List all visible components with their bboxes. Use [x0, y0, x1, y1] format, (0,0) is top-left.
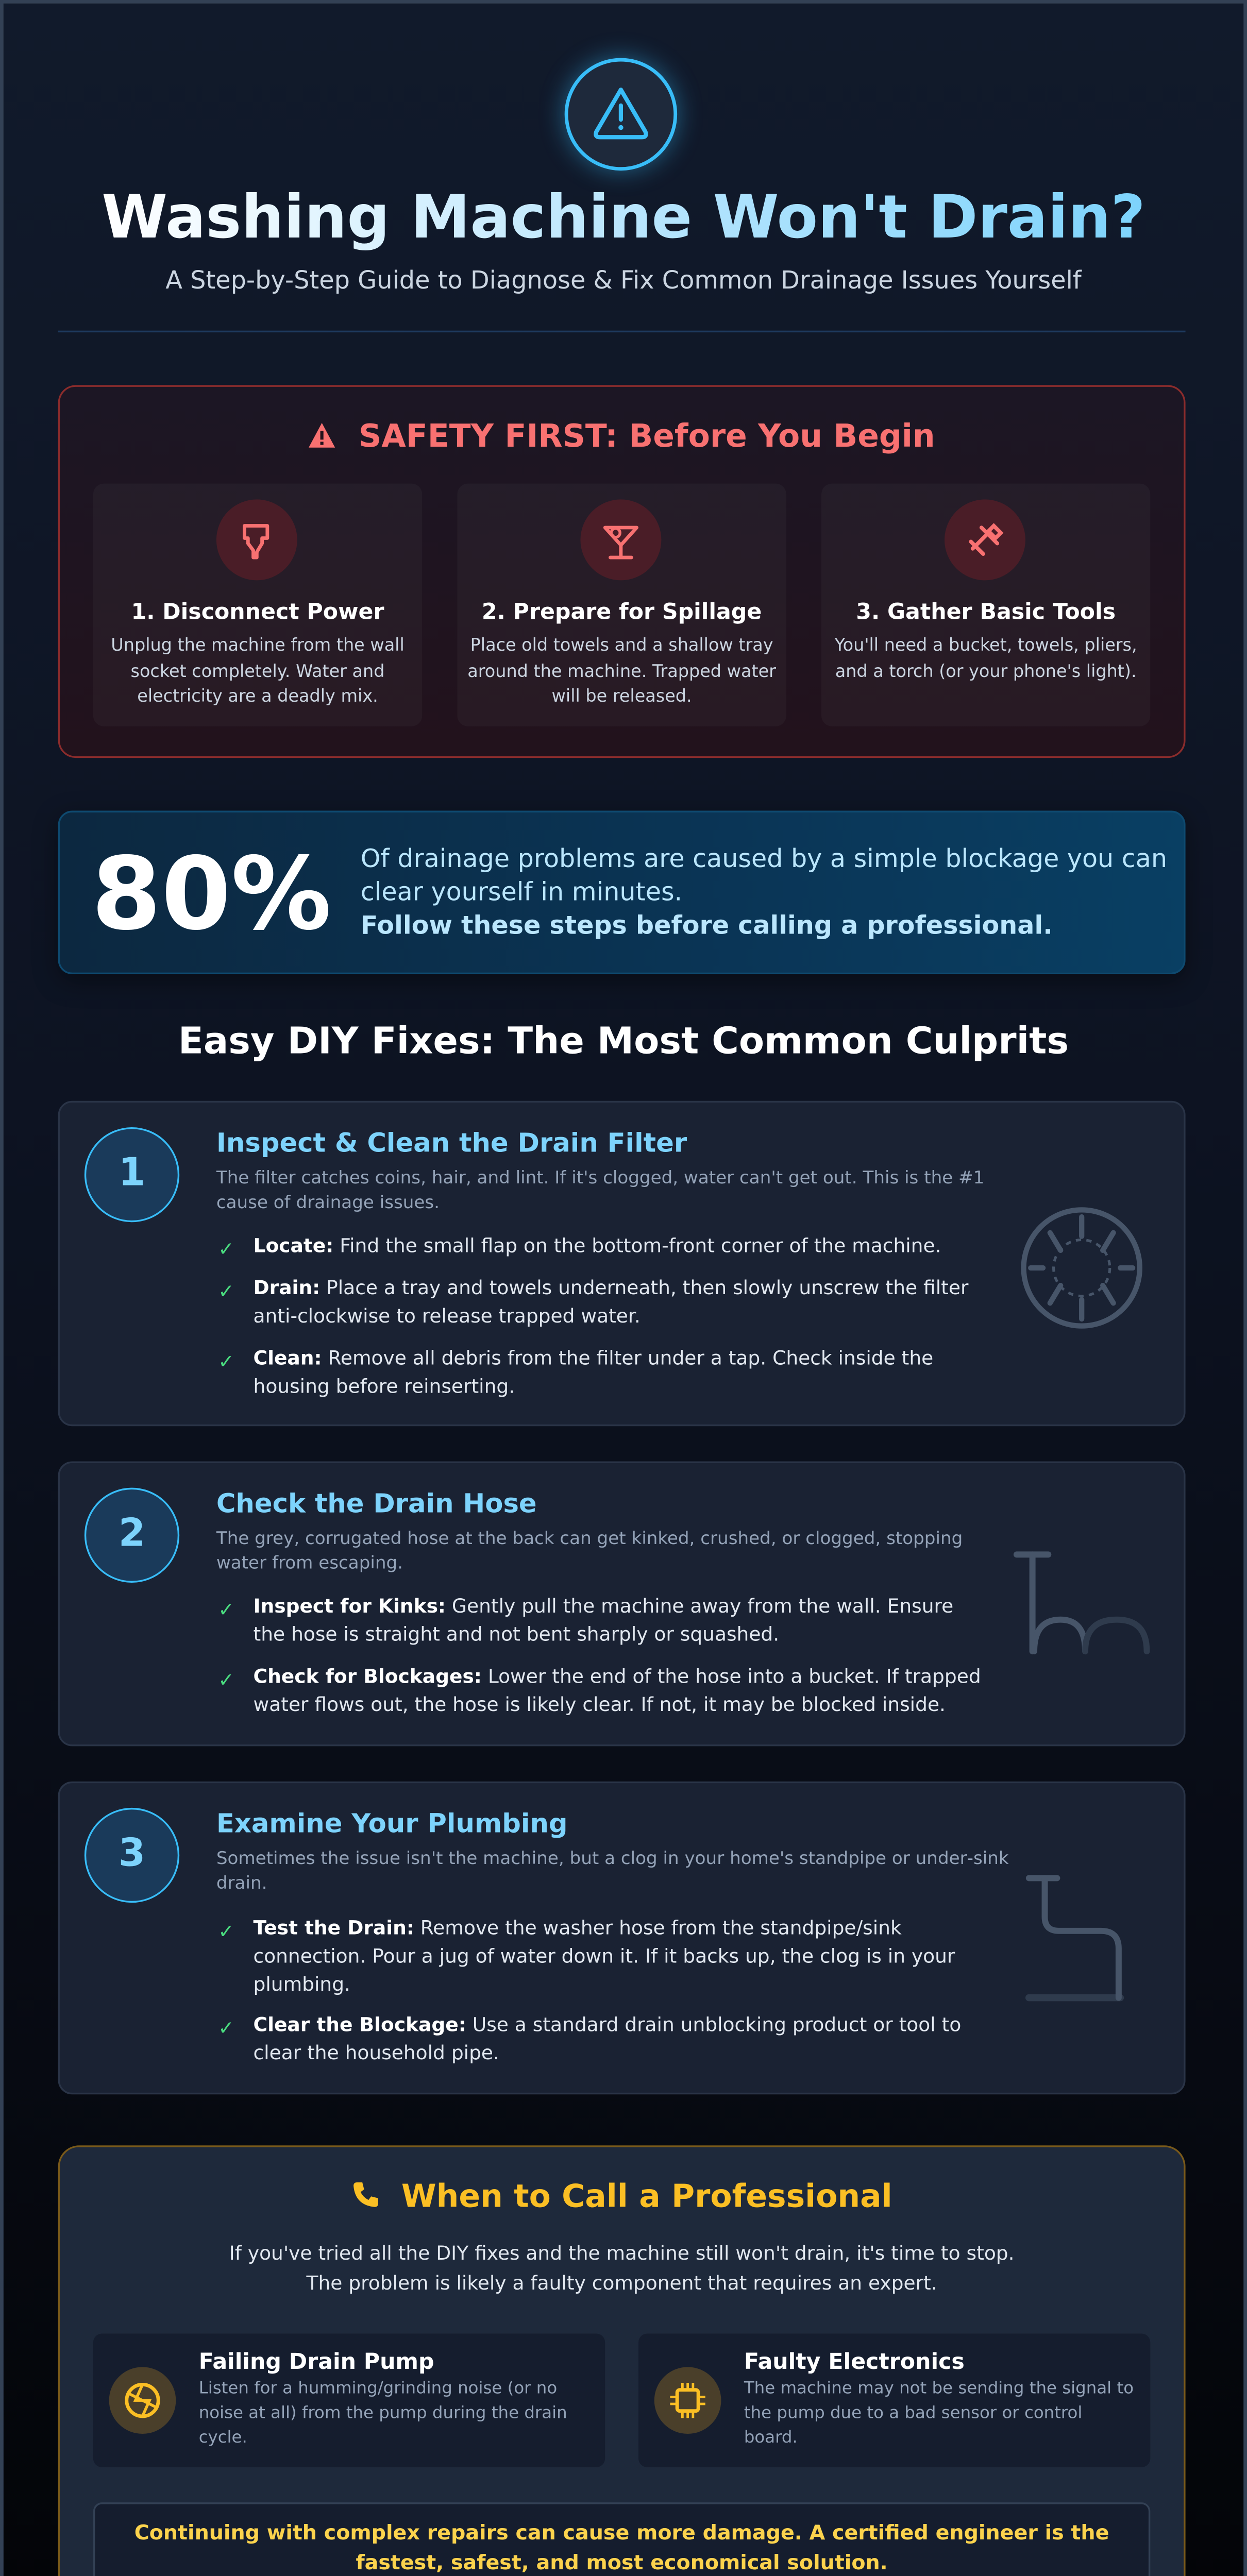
pro card: drain pump: cycle. — [199, 2429, 247, 2448]
safety card 2: 2. Prepare for Spillage — [482, 598, 762, 624]
stat text — [361, 846, 1167, 941]
card description: The grey, corrugated hose at the back can get kinked, crushed, or clogged, stopping water from escaping. — [216, 1530, 963, 1574]
safety card 3: 3. Gather Basic Tools — [856, 598, 1116, 624]
pro card: drain pump: Listen for a humming/grinding noise (or no — [199, 2379, 557, 2399]
pro card: electronics: The machine may not be sending the signal to — [744, 2379, 1134, 2399]
bullet: test: ✓ — [218, 1920, 234, 1943]
section heading: Easy DIY Fixes: The Most Common Culprits — [178, 1020, 1069, 1062]
safety card 1 — [93, 484, 422, 726]
pro intro text — [229, 2242, 1015, 2294]
card description: Sometimes the issue isn't the machine, but a clog in your home's standpipe or under‑sink drain. — [216, 1850, 1009, 1894]
safety heading: SAFETY FIRST: Before You Begin — [359, 418, 935, 455]
number badge 3: 3 — [119, 1833, 145, 1876]
subtitle: A Step-by-Step Guide to Diagnose & Fix Common Drainage Issues Yourself — [165, 267, 1082, 295]
number badge 2 — [85, 1488, 179, 1583]
warning callout: Continuing with complex repairs can cause more damage. A certified engineer is the fastest, safest, and most economical solution. — [134, 2520, 1109, 2574]
safety card 3: You'll need a bucket, towels, pliers, and a torch (or your phone's light). — [835, 637, 1137, 682]
number badge 3 — [85, 1808, 179, 1903]
pro card: electronics: board. — [744, 2429, 798, 2448]
safety card 2: Place old towels and a shallow tray around the machine. Trapped water will be released. — [467, 637, 776, 707]
warning callout — [93, 2502, 1150, 2576]
card title: Inspect & Clean the Drain Filter — [216, 1127, 687, 1159]
pro intro text: The problem is likely a faulty component that requires an expert. — [307, 2271, 937, 2294]
safety card 3 — [821, 484, 1150, 726]
card title: Check the Drain Hose — [216, 1488, 537, 1519]
pro intro text: If you've tried all the DIY fixes and the machine still won't drain, it's time to stop. — [229, 2242, 1015, 2265]
number badge 1: 1 — [119, 1152, 145, 1196]
card title: Examine Your Plumbing — [216, 1808, 568, 1839]
icon: hose — [1014, 1551, 1150, 1655]
bullet: kinks: ✓ — [218, 1599, 234, 1621]
icon: pipe — [1025, 1875, 1124, 2001]
safety card 2 — [457, 484, 786, 726]
bullet: blockages: Check for Blockages: Lower the end of the hose into a bucket. If trapped water flows out, the hose is likely clear. If not, it may be blocked inside. — [254, 1665, 981, 1716]
pro heading: When to Call a Professional — [401, 2179, 892, 2216]
icon: tools — [945, 499, 1025, 580]
safety card 1: Unplug the machine from the wall socket completely. Water and electricity are a deadly mix. — [111, 637, 405, 707]
pro card: electronics: Faulty Electronics — [744, 2348, 965, 2374]
card description: The filter catches coins, hair, and lint. If it's clogged, water can't get out. This is the #1 cause of drainage issues. — [216, 1170, 984, 1213]
pro card: drain pump: Failing Drain Pump — [199, 2348, 434, 2374]
bullet: clean: ✓ — [218, 1350, 234, 1374]
bullet: drain: Drain: Place a tray and towels underneath, then slowly unscrew the filter anti-clockwise to release trapped water. — [254, 1277, 968, 1328]
safety card 1: 1. Disconnect Power — [131, 598, 384, 624]
panel: safety first — [58, 385, 1186, 758]
number badge 1 — [85, 1127, 179, 1222]
panel: when to call a professional — [58, 2145, 1186, 2576]
bullet: locate: ✓ — [218, 1238, 234, 1261]
card 3: plumbing — [58, 1782, 1186, 2094]
bullet: kinks: Inspect for Kinks: Gently pull the machine away from the wall. Ensure the hose is straight and not bent sharply or squashed. — [254, 1595, 953, 1646]
pro card: electronics: the pump due to a bad sensor or control — [744, 2404, 1082, 2424]
bullet: locate: Locate: Find the small flap on the bottom-front corner of the machine. — [254, 1234, 941, 1258]
header icon: warning circle — [565, 58, 677, 171]
bullet: clear: Clear the Blockage: Use a standard drain unblocking product or tool to clear the household pipe. — [254, 2013, 961, 2064]
card 2: drain hose — [58, 1461, 1186, 1746]
card 1: drain filter — [58, 1101, 1186, 1426]
stat panel: 80% — [58, 811, 1186, 974]
pro card: drain pump — [93, 2333, 605, 2467]
bullet: clean: Clean: Remove all debris from the filter under a tap. Check inside the housing before reinserting. — [254, 1347, 933, 1398]
bullet: drain: ✓ — [218, 1280, 234, 1303]
bullet: test: Test the Drain: Remove the washer hose from the standpipe/sink connection. Pour a jug of water down it. If it backs up, the clog is in your plumbing. — [254, 1917, 955, 1996]
bullet: clear: ✓ — [218, 2017, 234, 2040]
number badge 2: 2 — [119, 1512, 145, 1556]
icon: spill — [580, 499, 661, 580]
stat text: Follow these steps before calling a professional. — [361, 913, 1053, 941]
icon: filter — [1021, 1207, 1142, 1329]
pro card: drain pump: noise at all) from the pump during the drain — [199, 2404, 567, 2424]
pro card: electronics — [638, 2333, 1150, 2467]
big number: 80% — [91, 837, 331, 953]
stat text: Of drainage problems are caused by a simple blockage you can clear yourself in minutes. — [361, 846, 1167, 907]
icon: pump — [109, 2367, 176, 2434]
bullet: blockages: ✓ — [218, 1669, 234, 1692]
icon: chip — [654, 2367, 721, 2434]
icon: plug — [216, 499, 297, 580]
title: Washing Machine Won't Drain? — [102, 183, 1145, 253]
